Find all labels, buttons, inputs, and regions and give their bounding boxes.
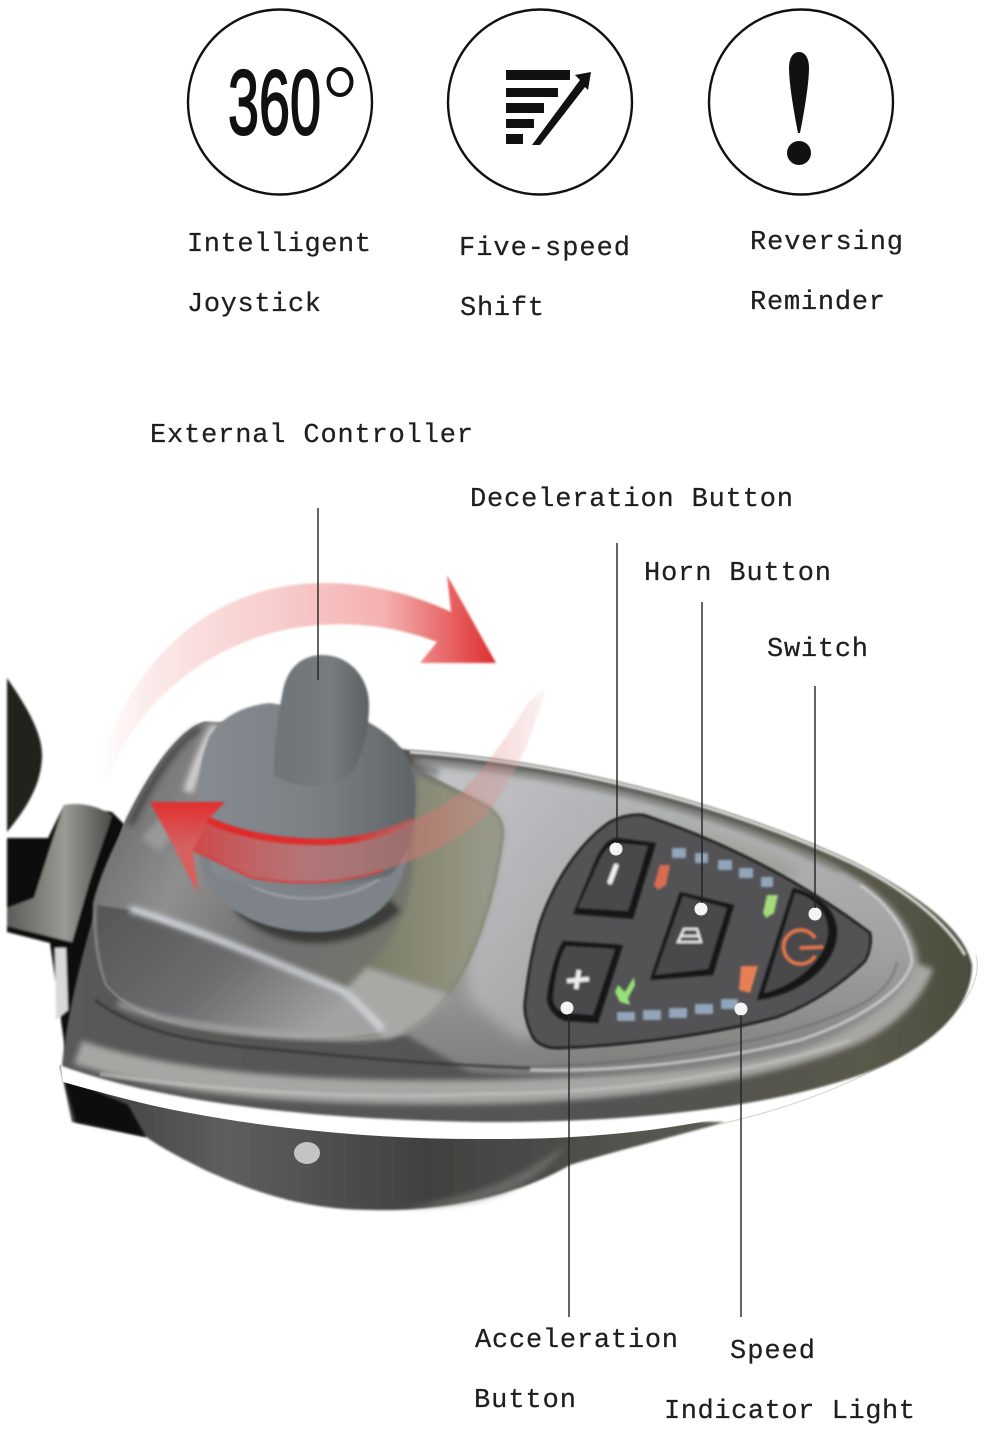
housing shell bbox=[62, 722, 972, 1122]
mount lower face bbox=[97, 905, 383, 1038]
leader lines bbox=[318, 508, 815, 1317]
icon: 360 degree joystick: 360 bbox=[228, 52, 321, 154]
control panel bbox=[525, 815, 871, 1048]
joystick dome bbox=[199, 703, 415, 890]
label: reversing reminder: Reversing bbox=[750, 228, 903, 258]
armrest shape at left bbox=[7, 678, 42, 832]
label: acceleration button bbox=[474, 1326, 678, 1416]
button: switch bbox=[757, 888, 837, 1000]
label: acceleration button: Button bbox=[474, 1386, 576, 1416]
red rotation arrow: lower bbox=[150, 690, 545, 893]
silver rim band bbox=[78, 965, 922, 1092]
small round badge bbox=[294, 1142, 320, 1164]
label: five-speed shift bbox=[459, 234, 630, 324]
mount olive tray bbox=[367, 775, 504, 993]
top rim highlight bbox=[410, 752, 965, 955]
label: intelligent joystick: Joystick bbox=[187, 290, 321, 320]
lower bowl bbox=[60, 1065, 725, 1210]
joystick knob bbox=[274, 655, 369, 786]
label: switch: Switch bbox=[767, 635, 868, 665]
speed indicator LEDs bbox=[617, 848, 773, 1021]
mount highlights bbox=[118, 726, 403, 1038]
label: reversing reminder: Reminder bbox=[750, 288, 885, 318]
controller photo illustration bbox=[7, 575, 977, 1210]
icon: 360 degree joystick bbox=[188, 10, 372, 194]
red rotation arrow: upper bbox=[98, 575, 496, 780]
label: five-speed shift: Shift bbox=[460, 294, 544, 324]
joystick skirt bbox=[200, 850, 408, 932]
label: horn button: Horn Button bbox=[644, 559, 831, 589]
label: intelligent joystick bbox=[187, 230, 371, 320]
label: deceleration button: Deceleration Button bbox=[470, 485, 793, 515]
label: external controller: External Controller bbox=[150, 421, 473, 451]
faint outer contour bbox=[720, 955, 977, 1124]
status icons bbox=[615, 865, 778, 1005]
raised joystick mount bbox=[93, 722, 504, 1041]
button: horn bbox=[650, 892, 734, 980]
label: speed indicator light: Indicator Light bbox=[664, 1397, 915, 1427]
button: deceleration bbox=[573, 838, 656, 919]
icon: reversing reminder bbox=[709, 10, 893, 194]
concentric rim lines bbox=[100, 885, 912, 1096]
label: intelligent joystick: Intelligent bbox=[187, 230, 371, 260]
white stripe bbox=[60, 960, 972, 1139]
shadow under mount bbox=[95, 1000, 530, 1068]
label: reversing reminder bbox=[750, 228, 903, 318]
label: five-speed shift: Five-speed bbox=[459, 234, 630, 264]
silver plate bbox=[380, 760, 918, 1076]
button: acceleration bbox=[547, 941, 623, 1023]
mounting bracket bbox=[7, 804, 124, 1070]
label: speed indicator light: Speed bbox=[730, 1337, 815, 1367]
label: speed indicator light bbox=[664, 1337, 915, 1427]
icon: five-speed shift bbox=[448, 10, 632, 194]
white marker dots bbox=[560, 842, 822, 1016]
label: acceleration button: Acceleration bbox=[475, 1326, 678, 1356]
